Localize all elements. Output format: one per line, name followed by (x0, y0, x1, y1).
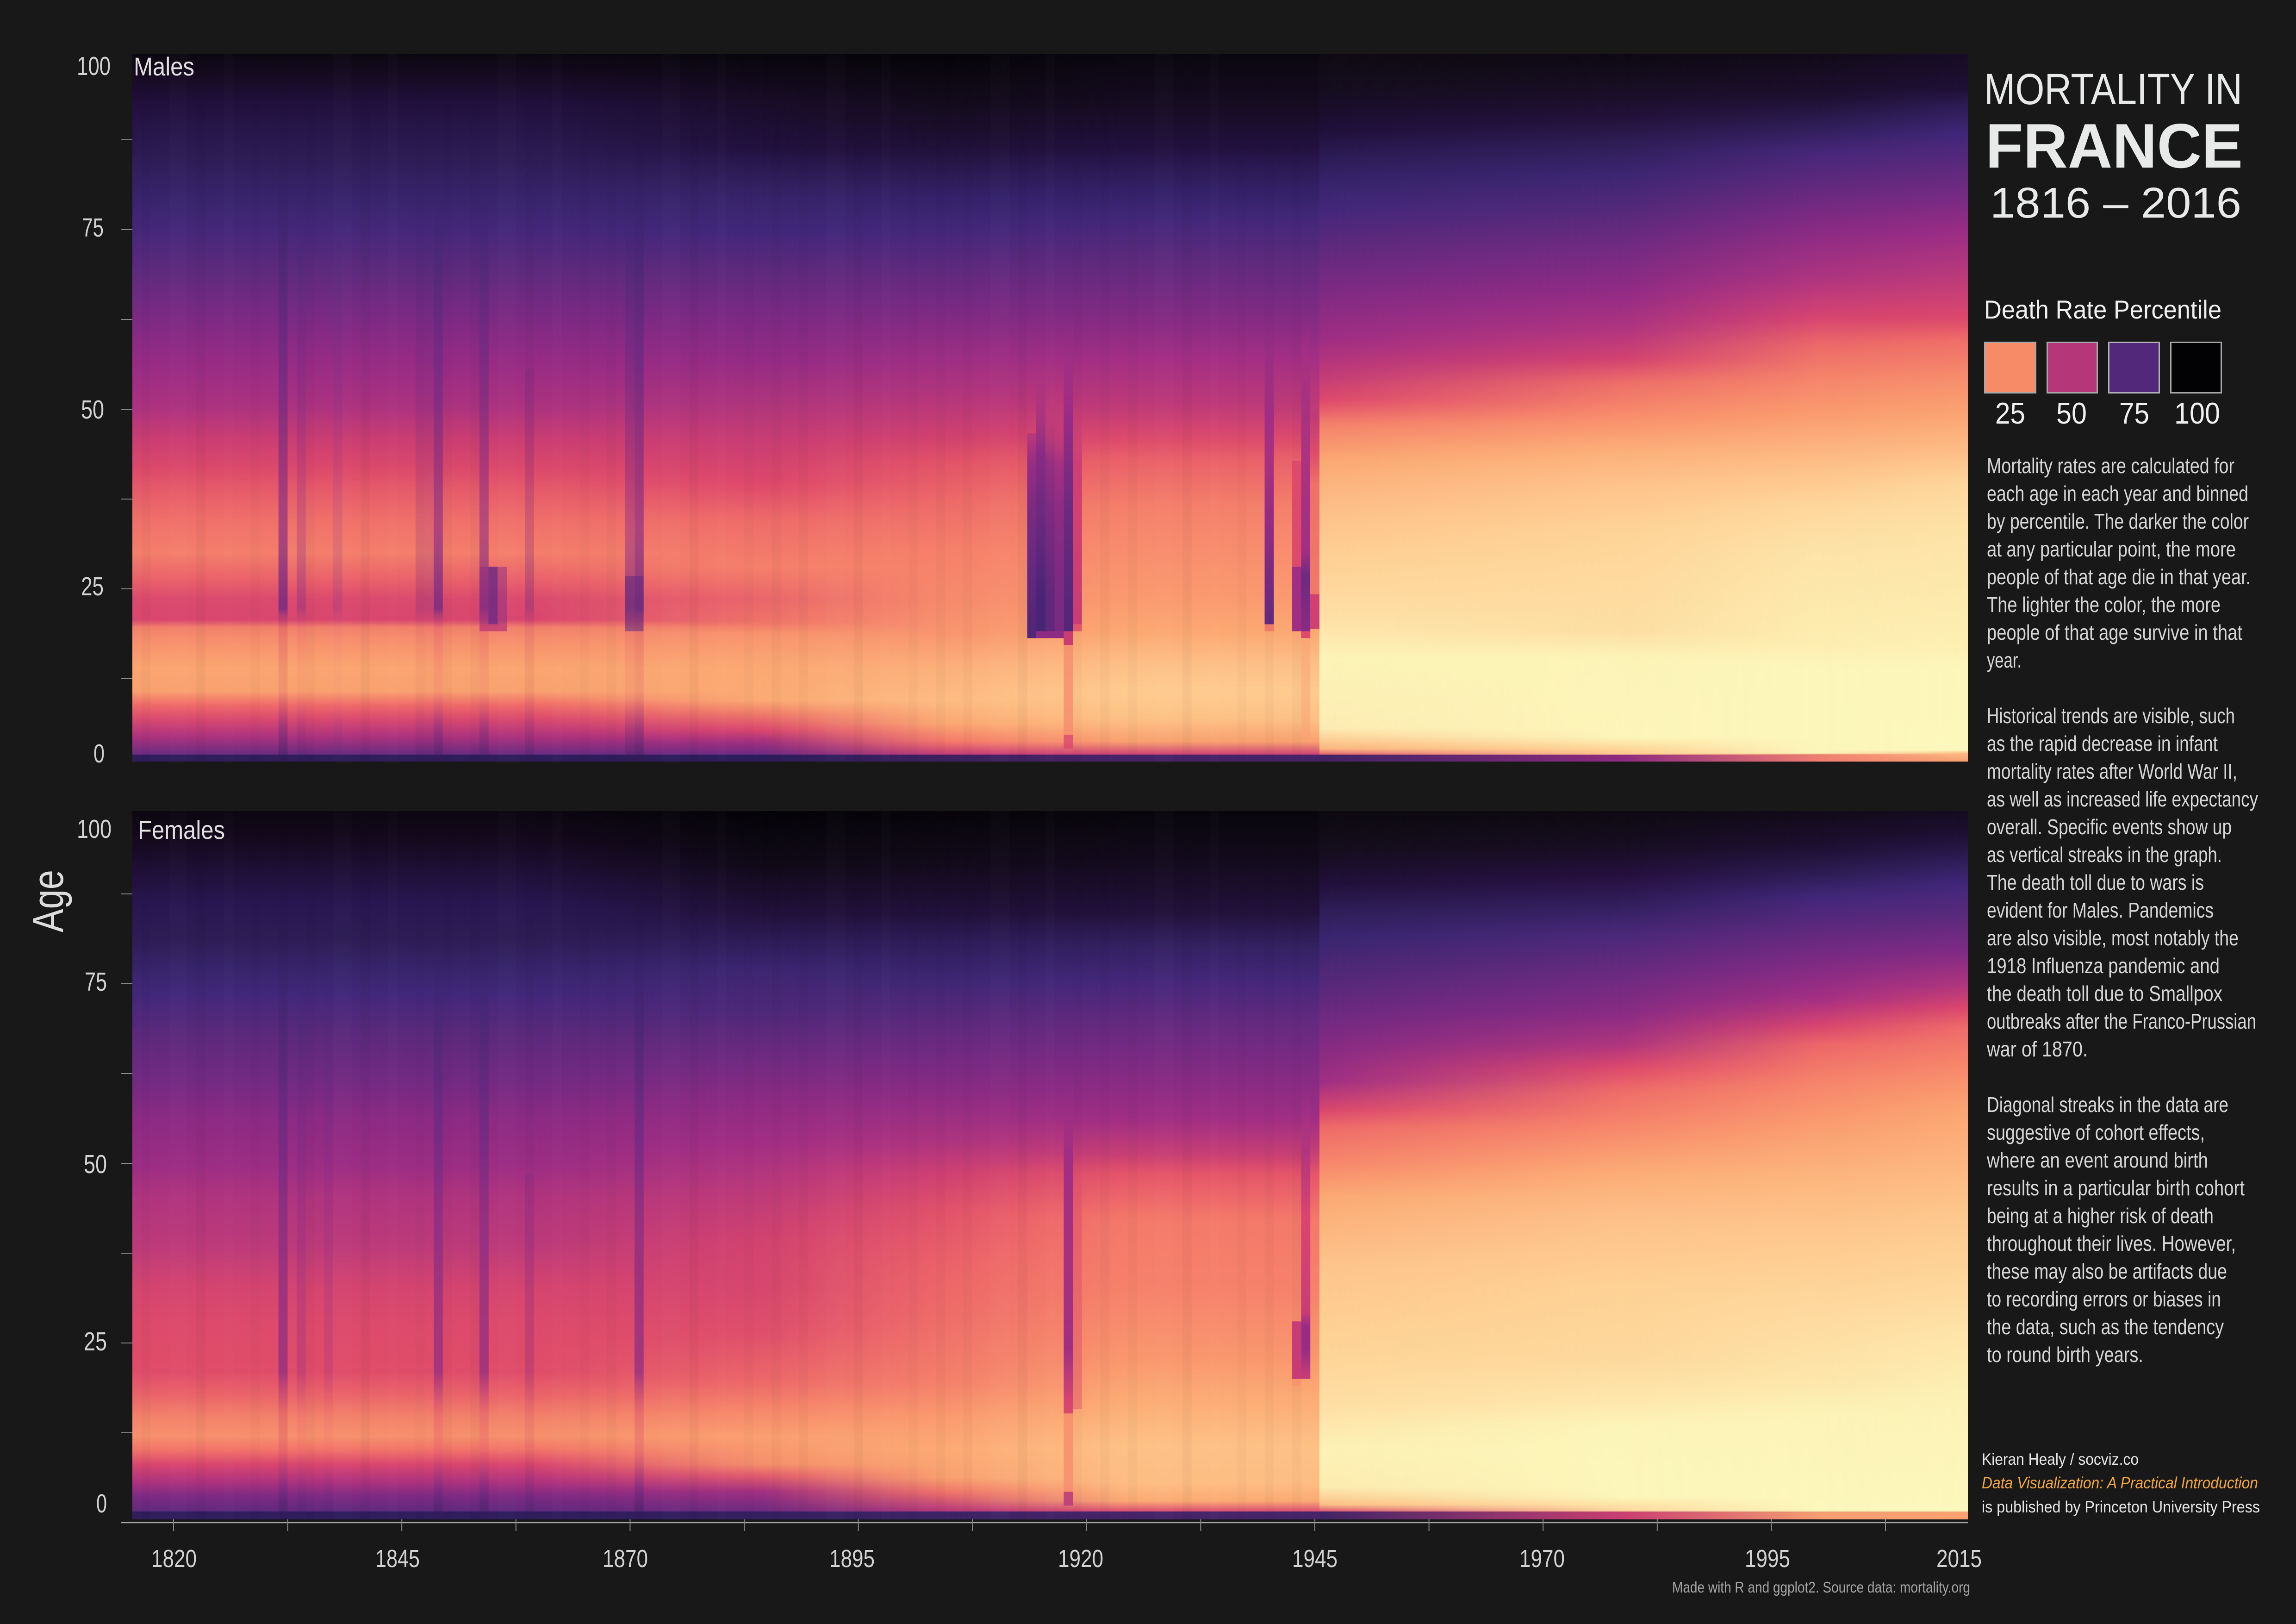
text block: explanation part 3 (1986, 1093, 2245, 1367)
credits: Data Visualization: A Practical Introduction (1982, 1474, 2258, 1492)
streak: 1849 cholera (434, 184, 443, 762)
block: World War I (1027, 323, 1082, 749)
credits (1982, 1450, 2260, 1516)
streak: 1834 (297, 184, 306, 762)
x axis: 1820 (151, 1545, 197, 1573)
x axis: 2015 (1936, 1545, 1982, 1573)
text block: explanation part 1: Mortality rates are calculated for (1987, 454, 2234, 478)
text block: explanation part 2: 1918 Influenza pandemic and (1987, 954, 2220, 978)
streak: 1871 smallpox (635, 943, 644, 1519)
y axis: Females: 0 (96, 1489, 107, 1518)
text block: explanation part 3: Diagonal streaks in the data are (1987, 1093, 2228, 1117)
legend (1985, 343, 2221, 430)
streak: World War II (1292, 1091, 1310, 1386)
text block: explanation part 3: the data, such as the tendency (1987, 1315, 2224, 1339)
text block: explanation part 1: The lighter the color, the more (1987, 593, 2221, 617)
streak: 1918 influenza (1064, 1082, 1082, 1505)
y axis: Males (77, 51, 132, 768)
x axis: 1970 (1519, 1545, 1565, 1573)
panel label: Females: Females (138, 815, 225, 844)
streak: 1847 (416, 184, 434, 762)
y axis: Males: 75 (82, 213, 104, 243)
x axis: 1945 (1292, 1545, 1338, 1573)
text block: explanation part 3: these may also be artifacts due (1987, 1259, 2227, 1283)
streak: 1859 (525, 1174, 534, 1519)
text block: explanation part 2: evident for Males. Pandemics (1987, 898, 2214, 922)
text block: explanation part 2: The death toll due to wars is (1987, 870, 2204, 894)
text block: explanation part 3: results in a particular birth cohort (1987, 1176, 2245, 1200)
title: FRANCE (1985, 111, 2243, 181)
streak: 1859 (525, 369, 534, 762)
x axis: 1920 (1058, 1545, 1103, 1573)
text block: explanation part 3: being at a higher risk of death (1987, 1204, 2214, 1228)
streak: 1871 young adults (625, 576, 643, 631)
text block: explanation part 2: the death toll due to Smallpox (1987, 981, 2222, 1006)
streak: 1832 epidemic (279, 943, 287, 1519)
text block: explanation part 3: where an event around birth (1986, 1148, 2208, 1172)
text block: explanation part 3: throughout their lives. However, (1987, 1231, 2236, 1255)
y axis: Males: 0 (93, 739, 105, 768)
text block: explanation part 2: as the rapid decrease in infant (1987, 731, 2218, 756)
text block: explanation part 2: are also visible, most notably the (1987, 926, 2239, 950)
y axis: Males: 100 (77, 51, 111, 81)
block: World War II (1264, 323, 1319, 739)
text block: explanation part 2: mortality rates after World War II, (1987, 759, 2237, 783)
text block: explanation part 2 (1986, 704, 2258, 1061)
credits: Kieran Healy / socviz.co (1982, 1450, 2139, 1468)
text block: explanation part 1: year. (1987, 648, 2022, 672)
legend: 75 (2119, 396, 2149, 430)
text block: explanation part 3: suggestive of cohort effects, (1987, 1120, 2205, 1144)
title: MORTALITY IN (1984, 65, 2242, 114)
streak: 1849 cholera (434, 943, 443, 1519)
legend: 100 (2174, 396, 2220, 430)
streak: 1870 war (625, 184, 635, 762)
text block: explanation part 3: to round birth years. (1987, 1343, 2143, 1367)
y axis: Females: 25 (84, 1327, 107, 1356)
text block: explanation part 2: overall. Specific events show up (1987, 815, 2232, 839)
streak: 1832 epidemic (279, 184, 287, 762)
title: 1816 – 2016 (1990, 179, 2241, 227)
y axis: Males: 25 (81, 572, 104, 601)
streak: 1834 (297, 943, 306, 1519)
source caption: Made with R and ggplot2. Source data: mortality.org (1672, 1579, 1970, 1596)
x axis (121, 1519, 1982, 1573)
y axis: Females: 75 (85, 967, 107, 997)
text block: explanation part 1: at any particular point, the more (1987, 537, 2236, 561)
text block: explanation part 1 (1987, 454, 2251, 672)
x axis: 1845 (375, 1545, 420, 1573)
chart: Females heatmap (132, 811, 1968, 1519)
text block: explanation part 3: to recording errors or biases in (1987, 1287, 2221, 1311)
panel label: Males: Males (134, 52, 194, 81)
y axis title: Age: Age (24, 870, 72, 932)
legend heading: Death Rate Percentile (1984, 295, 2221, 324)
text block: explanation part 2: Historical trends are visible, such (1987, 704, 2235, 728)
x axis: 1895 (829, 1545, 875, 1573)
streak: 1854 cholera (479, 943, 489, 1519)
y axis: Males: 50 (81, 395, 104, 425)
streak: 1838 (333, 184, 342, 762)
text block: explanation part 2: as vertical streaks in the graph. (1987, 843, 2222, 867)
streak: 1854 cholera (479, 184, 489, 762)
text block: explanation part 2: war of 1870. (1986, 1037, 2088, 1061)
y axis: Females (77, 814, 132, 1518)
chart: Males heatmap (132, 54, 1968, 762)
streak: 1871 war (635, 184, 644, 762)
blob: 1854-1856 young adults (479, 567, 507, 631)
y axis: Females: 50 (84, 1149, 107, 1179)
x axis: 1995 (1745, 1545, 1790, 1573)
y axis: Females: 100 (77, 814, 112, 844)
legend: 25 (1995, 396, 2025, 430)
credits: is published by Princeton University Press (1982, 1498, 2260, 1516)
streak: 1837 (324, 943, 333, 1519)
text block: explanation part 1: people of that age survive in that (1987, 620, 2242, 644)
legend: 50 (2056, 396, 2087, 430)
x axis: 1870 (603, 1545, 648, 1573)
title (1984, 65, 2243, 227)
